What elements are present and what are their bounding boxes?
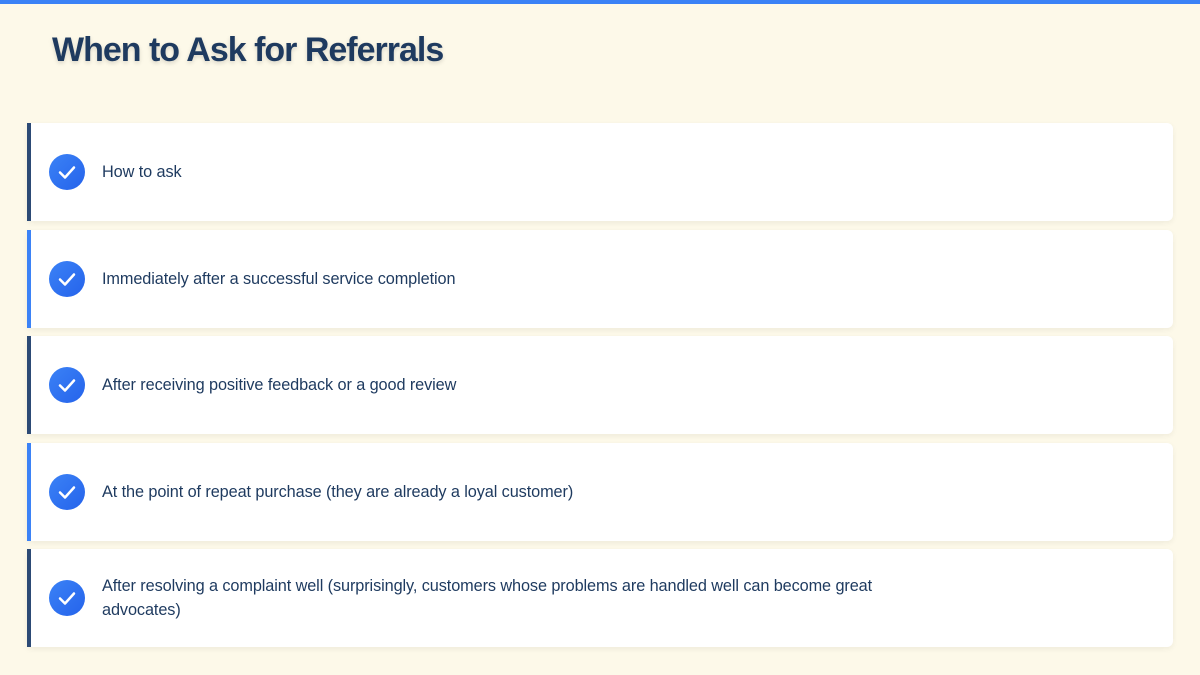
icon: check	[49, 474, 85, 510]
card 1	[27, 123, 1173, 221]
icon: check	[49, 261, 85, 297]
card 2	[27, 230, 1173, 328]
text: How to ask	[102, 163, 182, 181]
icon: check	[49, 154, 85, 190]
card 5	[27, 549, 1173, 647]
text: At the point of repeat purchase (they are already a loyal customer)	[102, 483, 573, 501]
icon: check	[49, 367, 85, 403]
text: After receiving positive feedback or a good review	[102, 376, 456, 394]
text: After resolving a complaint well (surprisingly, customers whose problems are handled well can become great advocates)	[102, 577, 872, 619]
text: Immediately after a successful service completion	[102, 270, 455, 288]
card 3	[27, 336, 1173, 434]
title: When to Ask for Referrals	[52, 31, 443, 69]
icon: check	[49, 580, 85, 616]
card 4	[27, 443, 1173, 541]
